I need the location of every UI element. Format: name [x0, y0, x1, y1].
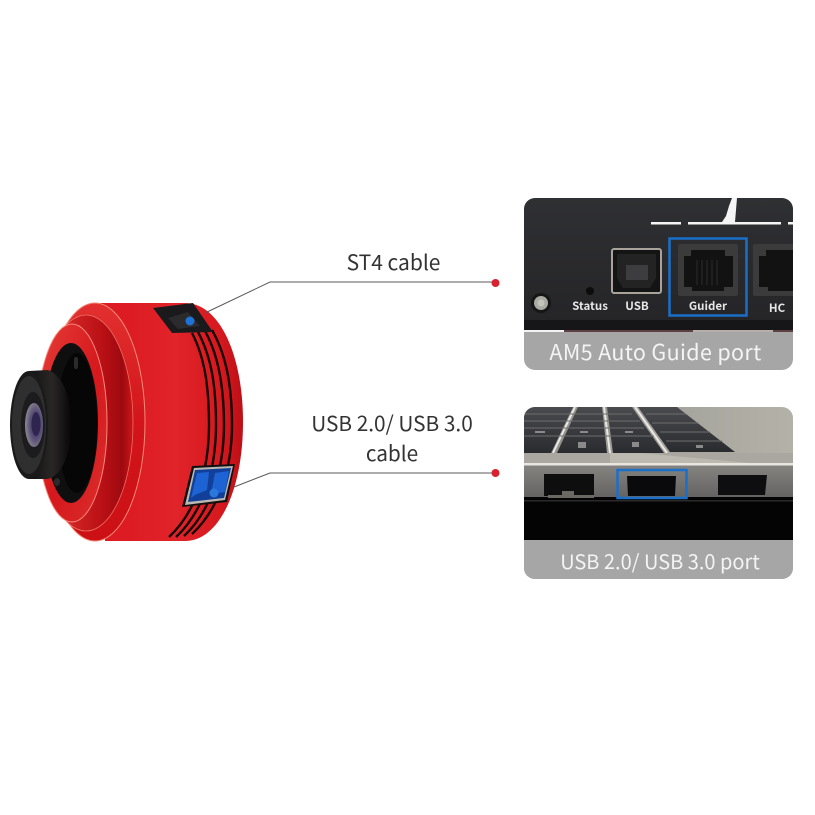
white markings — [651, 198, 794, 224]
camera body cylinder — [95, 303, 243, 541]
highlight box: USB — [618, 470, 686, 498]
guider socket — [678, 244, 738, 296]
infographic canvas — [10, 198, 793, 579]
dark base — [524, 497, 793, 540]
port labels: Guider — [689, 298, 728, 314]
lens barrel — [10, 370, 71, 479]
camera illustration — [10, 303, 243, 541]
black mount disc — [44, 343, 98, 503]
cooling grooves — [169, 330, 232, 537]
key row gaps — [524, 414, 722, 441]
panel: USB port — [524, 407, 793, 579]
label: ST4 cable: ST4 cable — [347, 247, 440, 277]
front ring — [37, 324, 107, 522]
caption bar — [524, 540, 793, 579]
leader line: ST4 — [205, 279, 500, 313]
caption: USB port: USB 2.0/ USB 3.0 port — [560, 546, 760, 575]
screw — [531, 293, 551, 313]
stepped ring — [39, 315, 133, 531]
ethernet port — [544, 474, 594, 498]
port labels: USB — [625, 298, 649, 314]
HC socket — [753, 244, 793, 296]
USB 3.0 port — [182, 464, 235, 507]
port labels — [572, 300, 785, 312]
status LED — [586, 287, 594, 295]
white key gaps — [553, 407, 667, 453]
label: USB cable: USB 2.0/ USB 3.0 — [311, 407, 473, 437]
key legends — [535, 431, 703, 448]
highlight box: guider — [670, 238, 746, 316]
leader line: USB — [234, 469, 500, 487]
second USB socket — [718, 475, 767, 495]
front flange — [45, 303, 145, 541]
ST4 port — [153, 303, 213, 333]
caption bar — [524, 332, 793, 370]
USB-B socket — [612, 249, 661, 293]
panel: AM5 auto guide port — [524, 198, 800, 370]
port labels: Status — [572, 298, 608, 314]
label: USB cable: cable — [366, 437, 418, 467]
caption: AM5 Auto Guide port: AM5 Auto Guide port — [549, 336, 762, 367]
port labels: HC — [769, 300, 786, 316]
side port strip — [524, 466, 793, 497]
keyboard keys — [524, 407, 735, 453]
lens glass — [25, 403, 43, 447]
highlighted USB socket — [627, 476, 676, 496]
